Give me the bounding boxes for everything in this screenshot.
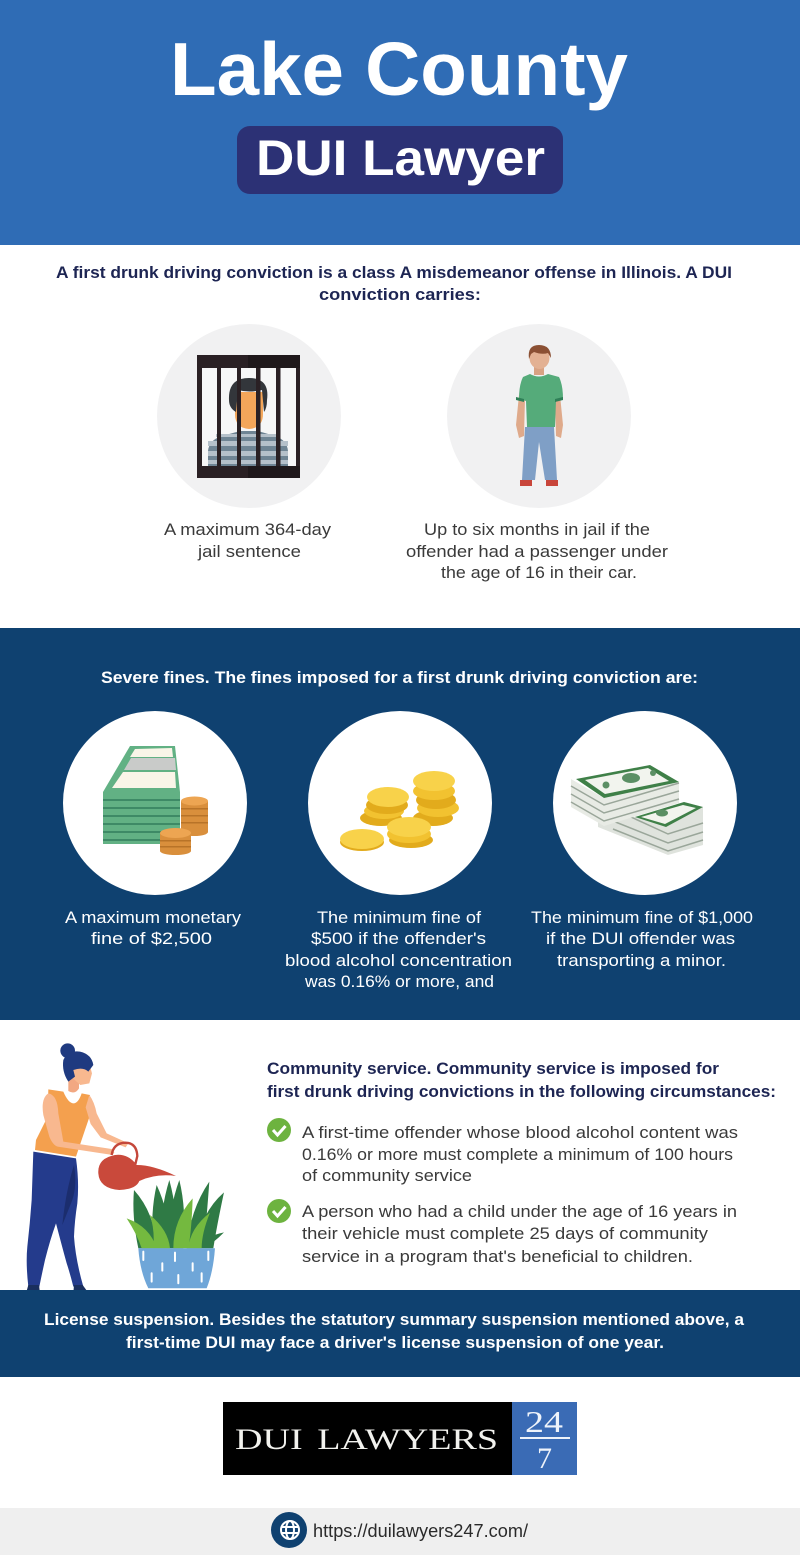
icon: cash stack with coins [63, 711, 247, 895]
logo: DUI Lawyers 24/7 [223, 1402, 577, 1475]
caption: passenger under 16 [406, 520, 668, 582]
subtitle pill: DUI Lawyer [256, 130, 545, 186]
panel: conviction penalties [56, 263, 732, 582]
panel: license suspension: first-time DUI may face a driver's license suspension of one year. [126, 1333, 664, 1352]
bullet text one: 0.16% or more must complete a minimum of 100 hours [302, 1145, 733, 1164]
community heading [267, 1059, 776, 1101]
caption: maximum jail sentence: A maximum 364-day [164, 520, 332, 539]
caption: passenger under 16: Up to six months in jail if the [424, 520, 650, 539]
panel: community service [26, 1043, 776, 1293]
icon: green check two [267, 1199, 291, 1223]
illustration: woman watering plant [26, 1043, 224, 1293]
icon: prisoner behind bars [157, 324, 341, 508]
caption: minimum fine $500: was 0.16% or more, and [304, 972, 494, 991]
logo: DUI Lawyers 24/7: 24 [525, 1404, 564, 1439]
caption: passenger under 16: offender had a passenger under [406, 542, 668, 561]
fines heading: Severe fines. The fines imposed for a first drunk driving conviction are: [101, 668, 698, 687]
footer bar [0, 1508, 800, 1555]
caption: maximum fine: fine of $2,500 [91, 929, 212, 948]
panel: header [0, 0, 800, 245]
icon: globe [271, 1512, 307, 1548]
panel: license suspension: License suspension. Besides the statutory summary suspension mentioned above, a [44, 1310, 745, 1329]
bullet text one [302, 1123, 738, 1185]
intro heading: conviction carries: [319, 285, 481, 304]
intro heading [56, 263, 732, 304]
title: Lake County [170, 27, 628, 111]
caption: minimum fine $1,000: if the DUI offender was [546, 929, 735, 948]
caption: maximum jail sentence [164, 520, 332, 561]
bullet text two: A person who had a child under the age of 16 years in [302, 1202, 737, 1221]
bullet text two: their vehicle must complete 25 days of community [302, 1224, 709, 1243]
logo: DUI Lawyers 24/7: 7 [537, 1442, 552, 1475]
panel: severe fines [0, 628, 800, 1020]
intro heading: A first drunk driving conviction is a class A misdemeanor offense in Illinois. A DUI [56, 263, 732, 282]
website url: https://duilawyers247.com/ [313, 1521, 528, 1541]
caption: minimum fine $1,000 [531, 908, 753, 970]
icon: green check one [267, 1118, 291, 1142]
bullet text one: of community service [302, 1166, 472, 1185]
community heading: first drunk driving convictions in the following circumstances: [267, 1082, 776, 1101]
caption: minimum fine $1,000: transporting a minor. [557, 951, 726, 970]
icon: banknote bundles [553, 711, 737, 895]
subtitle pill [237, 126, 563, 194]
logo: DUI Lawyers 24/7: DUI LAWYERS [235, 1423, 498, 1456]
caption: minimum fine $500: blood alcohol concentration [285, 951, 512, 970]
bullet text two [302, 1202, 737, 1266]
caption: minimum fine $1,000: The minimum fine of $1,000 [531, 908, 753, 927]
bullet text two: service in a program that's beneficial to children. [302, 1247, 693, 1266]
community heading: Community service. Community service is imposed for [267, 1059, 719, 1078]
caption: maximum fine [65, 908, 242, 948]
caption: minimum fine $500: The minimum fine of [317, 908, 481, 927]
caption: minimum fine $500: $500 if the offender's [311, 929, 486, 948]
panel: license suspension [0, 1290, 800, 1377]
icon: gold coins [308, 711, 492, 895]
caption: minimum fine $500 [285, 908, 512, 991]
caption: maximum jail sentence: jail sentence [197, 542, 301, 561]
icon: young man standing [447, 324, 631, 508]
caption: maximum fine: A maximum monetary [65, 908, 242, 927]
caption: passenger under 16: the age of 16 in their car. [441, 563, 637, 582]
bullet text one: A first-time offender whose blood alcohol content was [302, 1123, 738, 1142]
